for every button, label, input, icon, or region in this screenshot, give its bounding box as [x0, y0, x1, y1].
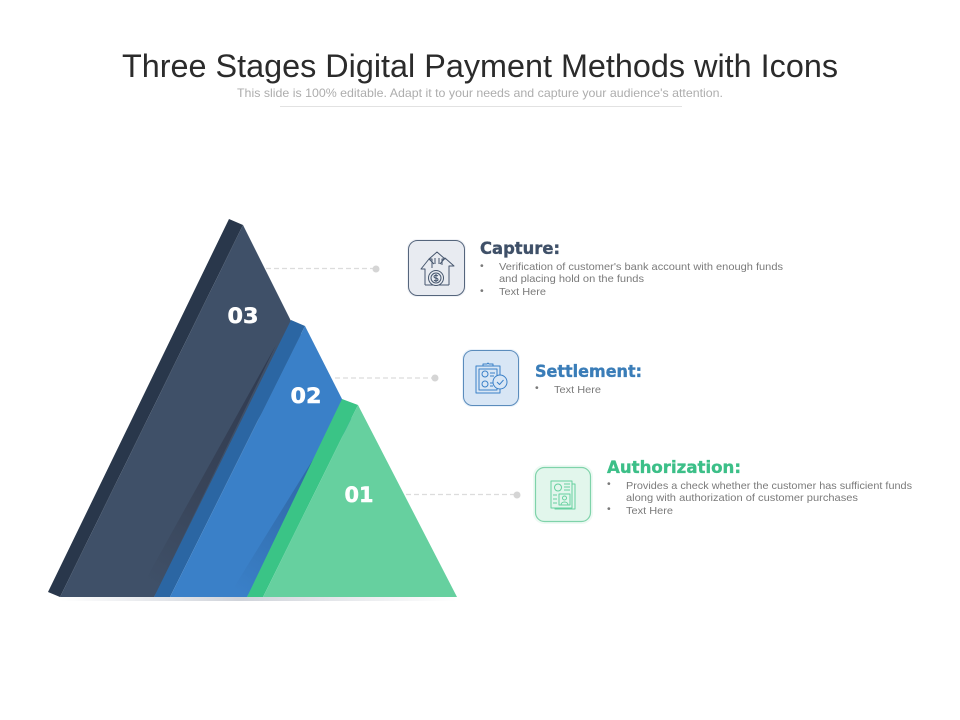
title: Three Stages Digital Payment Methods with Icons	[122, 48, 838, 84]
text: authorization bullets: along with authorization of customer purchases	[626, 492, 858, 504]
text: settlement bullets	[535, 382, 601, 396]
text: authorization bullets: Text Here	[626, 505, 673, 517]
stage 03 segment	[48, 219, 305, 597]
number 03: 03	[228, 304, 258, 328]
base shadow	[60, 597, 457, 601]
text: settlement bullets: •	[535, 382, 539, 394]
connector: capture	[266, 266, 380, 272]
number 02: 02	[290, 384, 322, 408]
text: capture bullets: Verification of customer's bank account with enough funds	[499, 261, 783, 273]
text: capture bullets	[480, 260, 783, 298]
icon: house with dollar coin	[407, 239, 466, 297]
text: capture bullets: Text Here	[499, 286, 546, 298]
text: capture bullets: and placing hold on the funds	[499, 273, 644, 285]
heading: authorization: Authorization:	[607, 458, 741, 477]
text: authorization bullets: •	[607, 478, 611, 490]
text: capture bullets: •	[480, 285, 484, 297]
stage 02 segment	[154, 320, 352, 597]
text: capture bullets: •	[480, 260, 484, 272]
icon: clipboard with check	[462, 349, 520, 407]
connector: authorization	[406, 492, 520, 498]
text: settlement bullets: Text Here	[554, 384, 601, 396]
pyramid diagram	[48, 219, 457, 601]
text: authorization bullets: Provides a check whether the customer has sufficient funds	[626, 480, 912, 492]
heading: capture: Capture:	[480, 239, 560, 258]
stage 01 segment	[247, 399, 457, 597]
subtitle: This slide is 100% editable. Adapt it to your needs and capture your audience's attention.	[237, 86, 723, 100]
connector: settlement	[335, 374, 438, 382]
number 01: 01	[344, 483, 374, 507]
heading: settlement: Settlement:	[535, 362, 642, 381]
text: authorization bullets: •	[607, 503, 611, 515]
icon: documents with portrait	[533, 465, 593, 524]
text: authorization bullets	[607, 478, 912, 517]
